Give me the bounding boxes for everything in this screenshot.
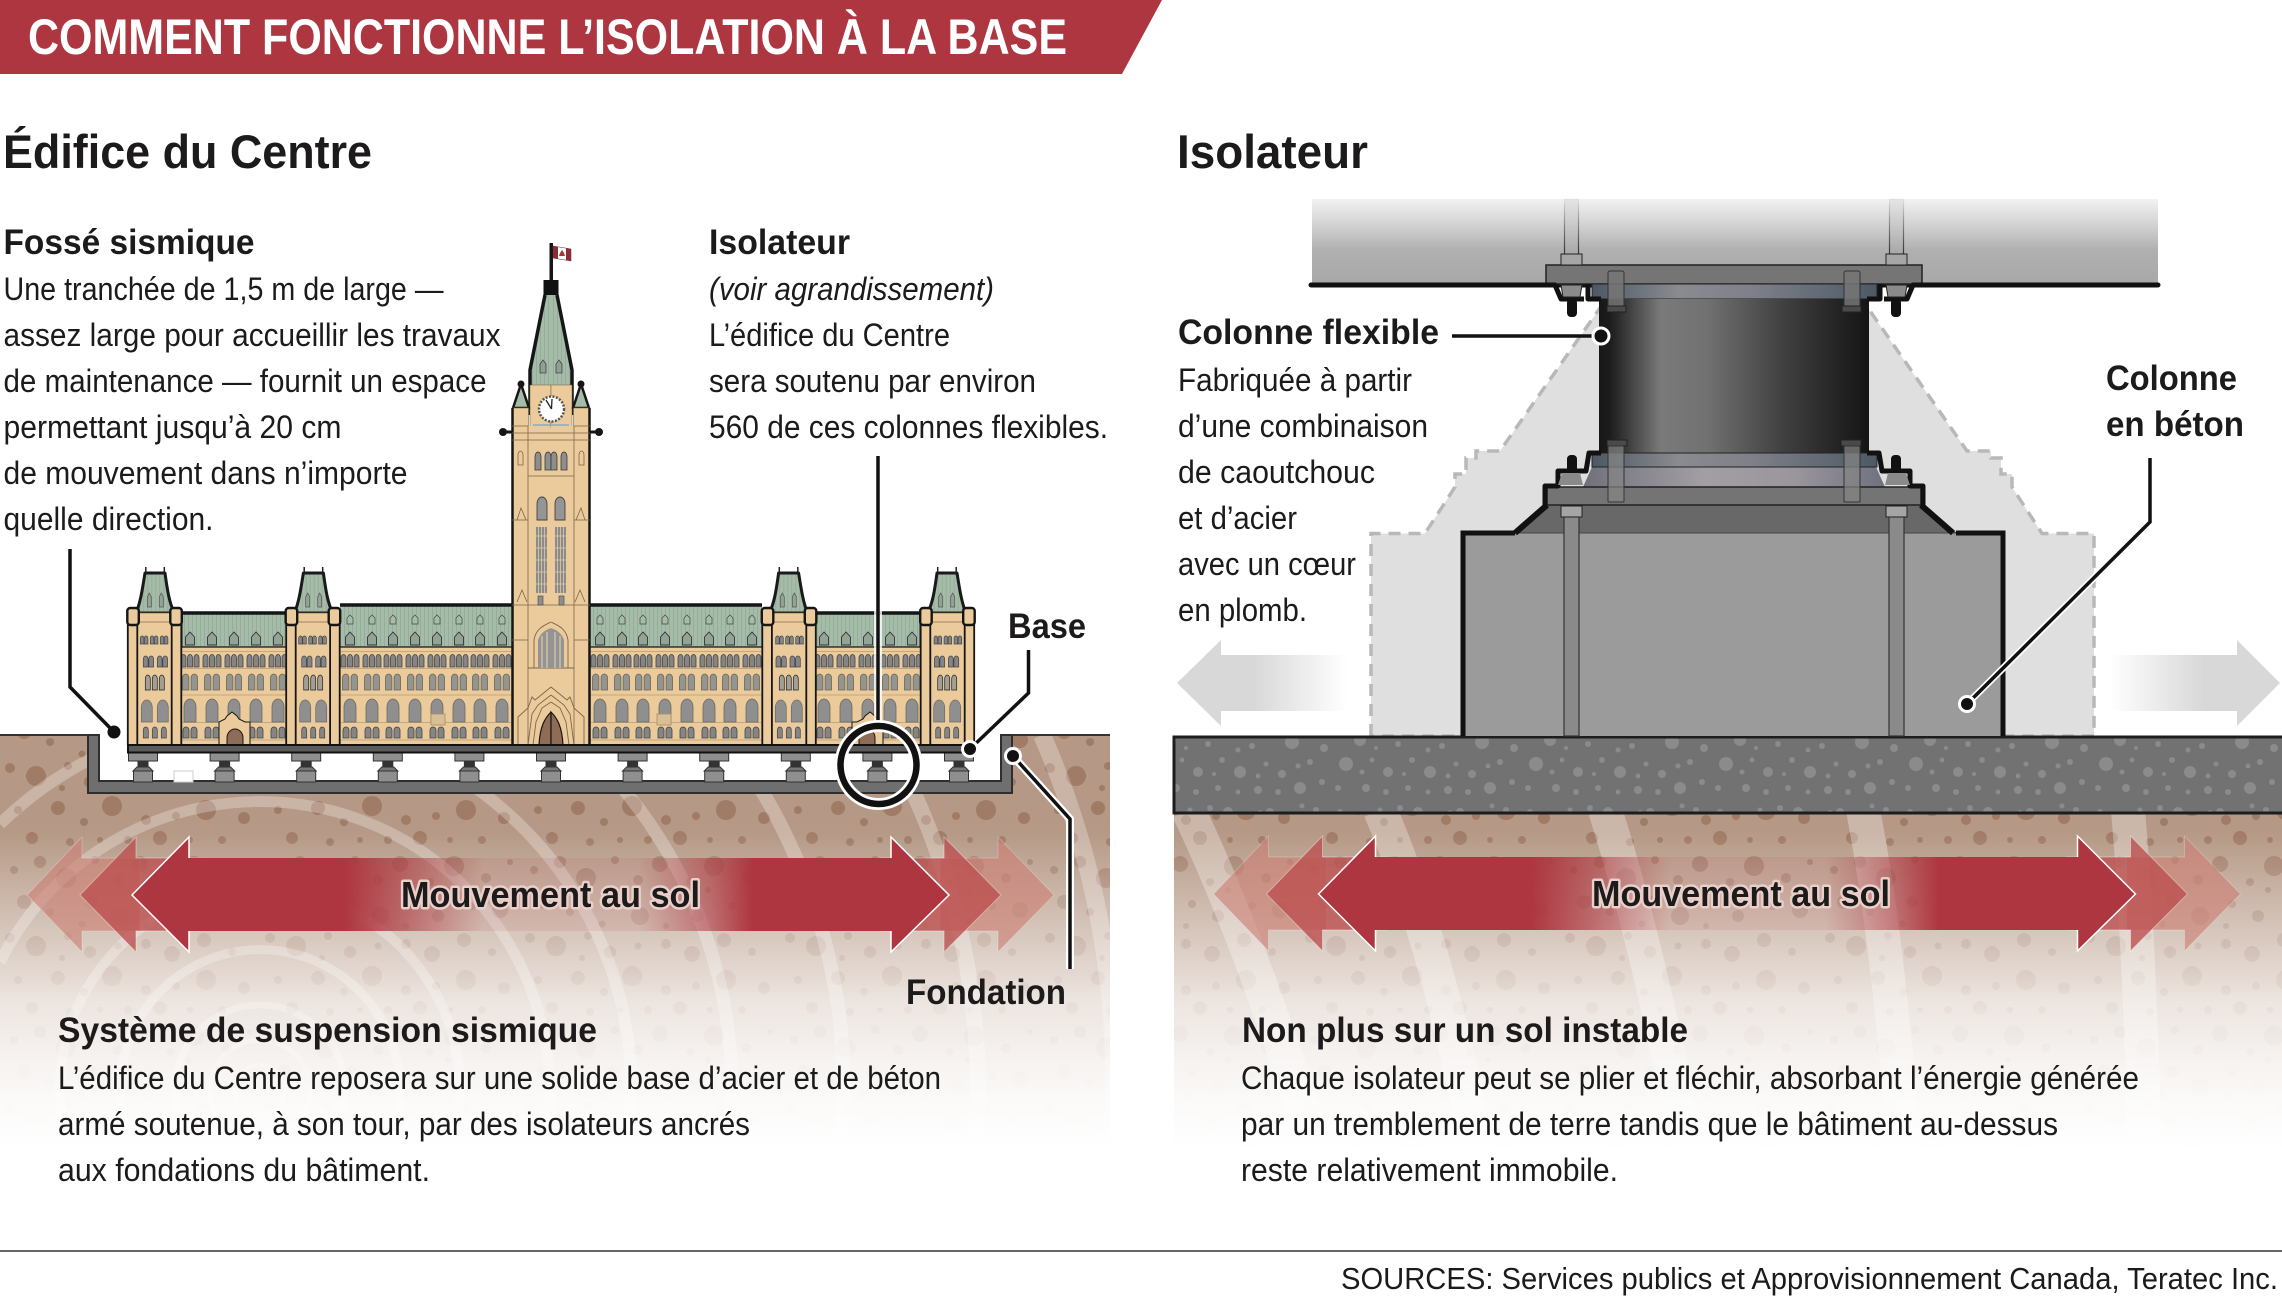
leader: Fondation [1006, 748, 1070, 969]
text: Isolateur: sera soutenu par environ [709, 363, 1036, 399]
text: Fossé sismique: Une tranchée de 1,5 m de large — [4, 271, 444, 307]
label: Colonne en béton [2106, 359, 2244, 444]
arrow: ground movement left [27, 837, 1054, 952]
label: Fondation: Fondation [906, 973, 1066, 1012]
upper beam [1311, 199, 2158, 285]
text: Colonne flexible: Fabriquée à partir [1178, 362, 1412, 398]
heading: Édifice du Centre: Édifice du Centre [3, 125, 372, 178]
arrow: ground movement right [1214, 836, 2240, 951]
text: Système de suspension sismique: L’édifice du Centre reposera sur une solide base d’acier et de béton [58, 1060, 941, 1096]
text: Isolateur: L’édifice du Centre [709, 317, 950, 353]
title banner: COMMENT FONCTIONNE L’ISOLATION À LA BASE [28, 9, 1067, 65]
text: Colonne flexible: avec un cœur [1178, 546, 1356, 582]
text: Colonne flexible: d’une combinaison [1178, 408, 1428, 444]
side arrow right [2110, 640, 2280, 726]
seismic bands [1174, 814, 2157, 1034]
text: Système de suspension sismique: armé soutenue, à son tour, par des isolateurs ancrés [58, 1106, 750, 1142]
text: Fossé sismique: de maintenance — fournit un espace [4, 363, 486, 399]
label: Colonne en béton: Colonne [2106, 359, 2237, 398]
text: Non plus sur un sol instable [1241, 1011, 2139, 1188]
flag [550, 243, 571, 281]
text: Non plus sur un sol instable: Chaque isolateur peut se plier et fléchir, absorbant l’énergie générée [1241, 1060, 2139, 1096]
isolators under building [128, 752, 974, 782]
concrete slab [1174, 737, 2282, 813]
rubber core [1599, 299, 1869, 453]
side arrow left [1177, 640, 1347, 726]
text: Non plus sur un sol instable: Non plus sur un sol instable [1242, 1011, 1688, 1050]
text: Isolateur: Isolateur [709, 223, 850, 262]
text: Non plus sur un sol instable: reste relativement immobile. [1241, 1152, 1618, 1188]
text: Système de suspension sismique: Système de suspension sismique [58, 1011, 597, 1050]
text: Système de suspension sismique: aux fondations du bâtiment. [58, 1152, 430, 1188]
clock [539, 396, 564, 422]
panel: right soil [1174, 814, 2282, 1098]
leader: Base [962, 650, 1028, 756]
text: Colonne flexible: en plomb. [1178, 592, 1307, 628]
text: Fossé sismique: quelle direction. [4, 501, 214, 537]
text: Fossé sismique: assez large pour accueillir les travaux [4, 317, 501, 353]
text: Non plus sur un sol instable: par un tremblement de terre tandis que le bâtiment au-dessus [1241, 1106, 2058, 1142]
text: Fossé sismique: permettant jusqu’à 20 cm [4, 409, 342, 445]
text: Isolateur: (voir agrandissement) [709, 271, 994, 307]
leader: Colonne flexible [1452, 328, 1609, 344]
label: Mouvement au sol right: Mouvement au sol [1592, 873, 1890, 914]
foundation trench [88, 734, 1012, 793]
text: Fossé sismique: Fossé sismique [4, 223, 254, 262]
text: Colonne flexible: et d’acier [1178, 500, 1297, 536]
label: Colonne en béton: en béton [2106, 405, 2244, 444]
text: Colonne flexible: Colonne flexible [1178, 313, 1439, 352]
flexible column isolator [1515, 199, 1953, 736]
label: Base: Base [1008, 607, 1086, 646]
text: Fossé sismique [4, 223, 501, 537]
label: Mouvement au sol left: Mouvement au sol [401, 874, 700, 915]
text: Système de suspension sismique [58, 1011, 941, 1188]
leader and circle: Isolateur [840, 456, 916, 804]
building: Centre Block [127, 243, 975, 752]
seismic rings [0, 736, 1110, 1016]
text: Isolateur: 560 de ces colonnes flexibles. [709, 409, 1108, 445]
panel: left soil with trench [0, 734, 1110, 1098]
leader: Colonne en béton [1960, 458, 2150, 712]
text: Colonne flexible: de caoutchouc [1178, 454, 1375, 490]
heading: Isolateur: Isolateur [1177, 125, 1368, 178]
text: Isolateur [709, 223, 1108, 445]
text: Colonne flexible [1178, 313, 1439, 628]
ghost building outline [1371, 308, 2094, 736]
leader: Fossé sismique [70, 549, 120, 738]
text: Fossé sismique: de mouvement dans n’importe [4, 455, 408, 491]
footer rule [0, 1250, 2282, 1252]
concrete column [1461, 505, 2005, 736]
